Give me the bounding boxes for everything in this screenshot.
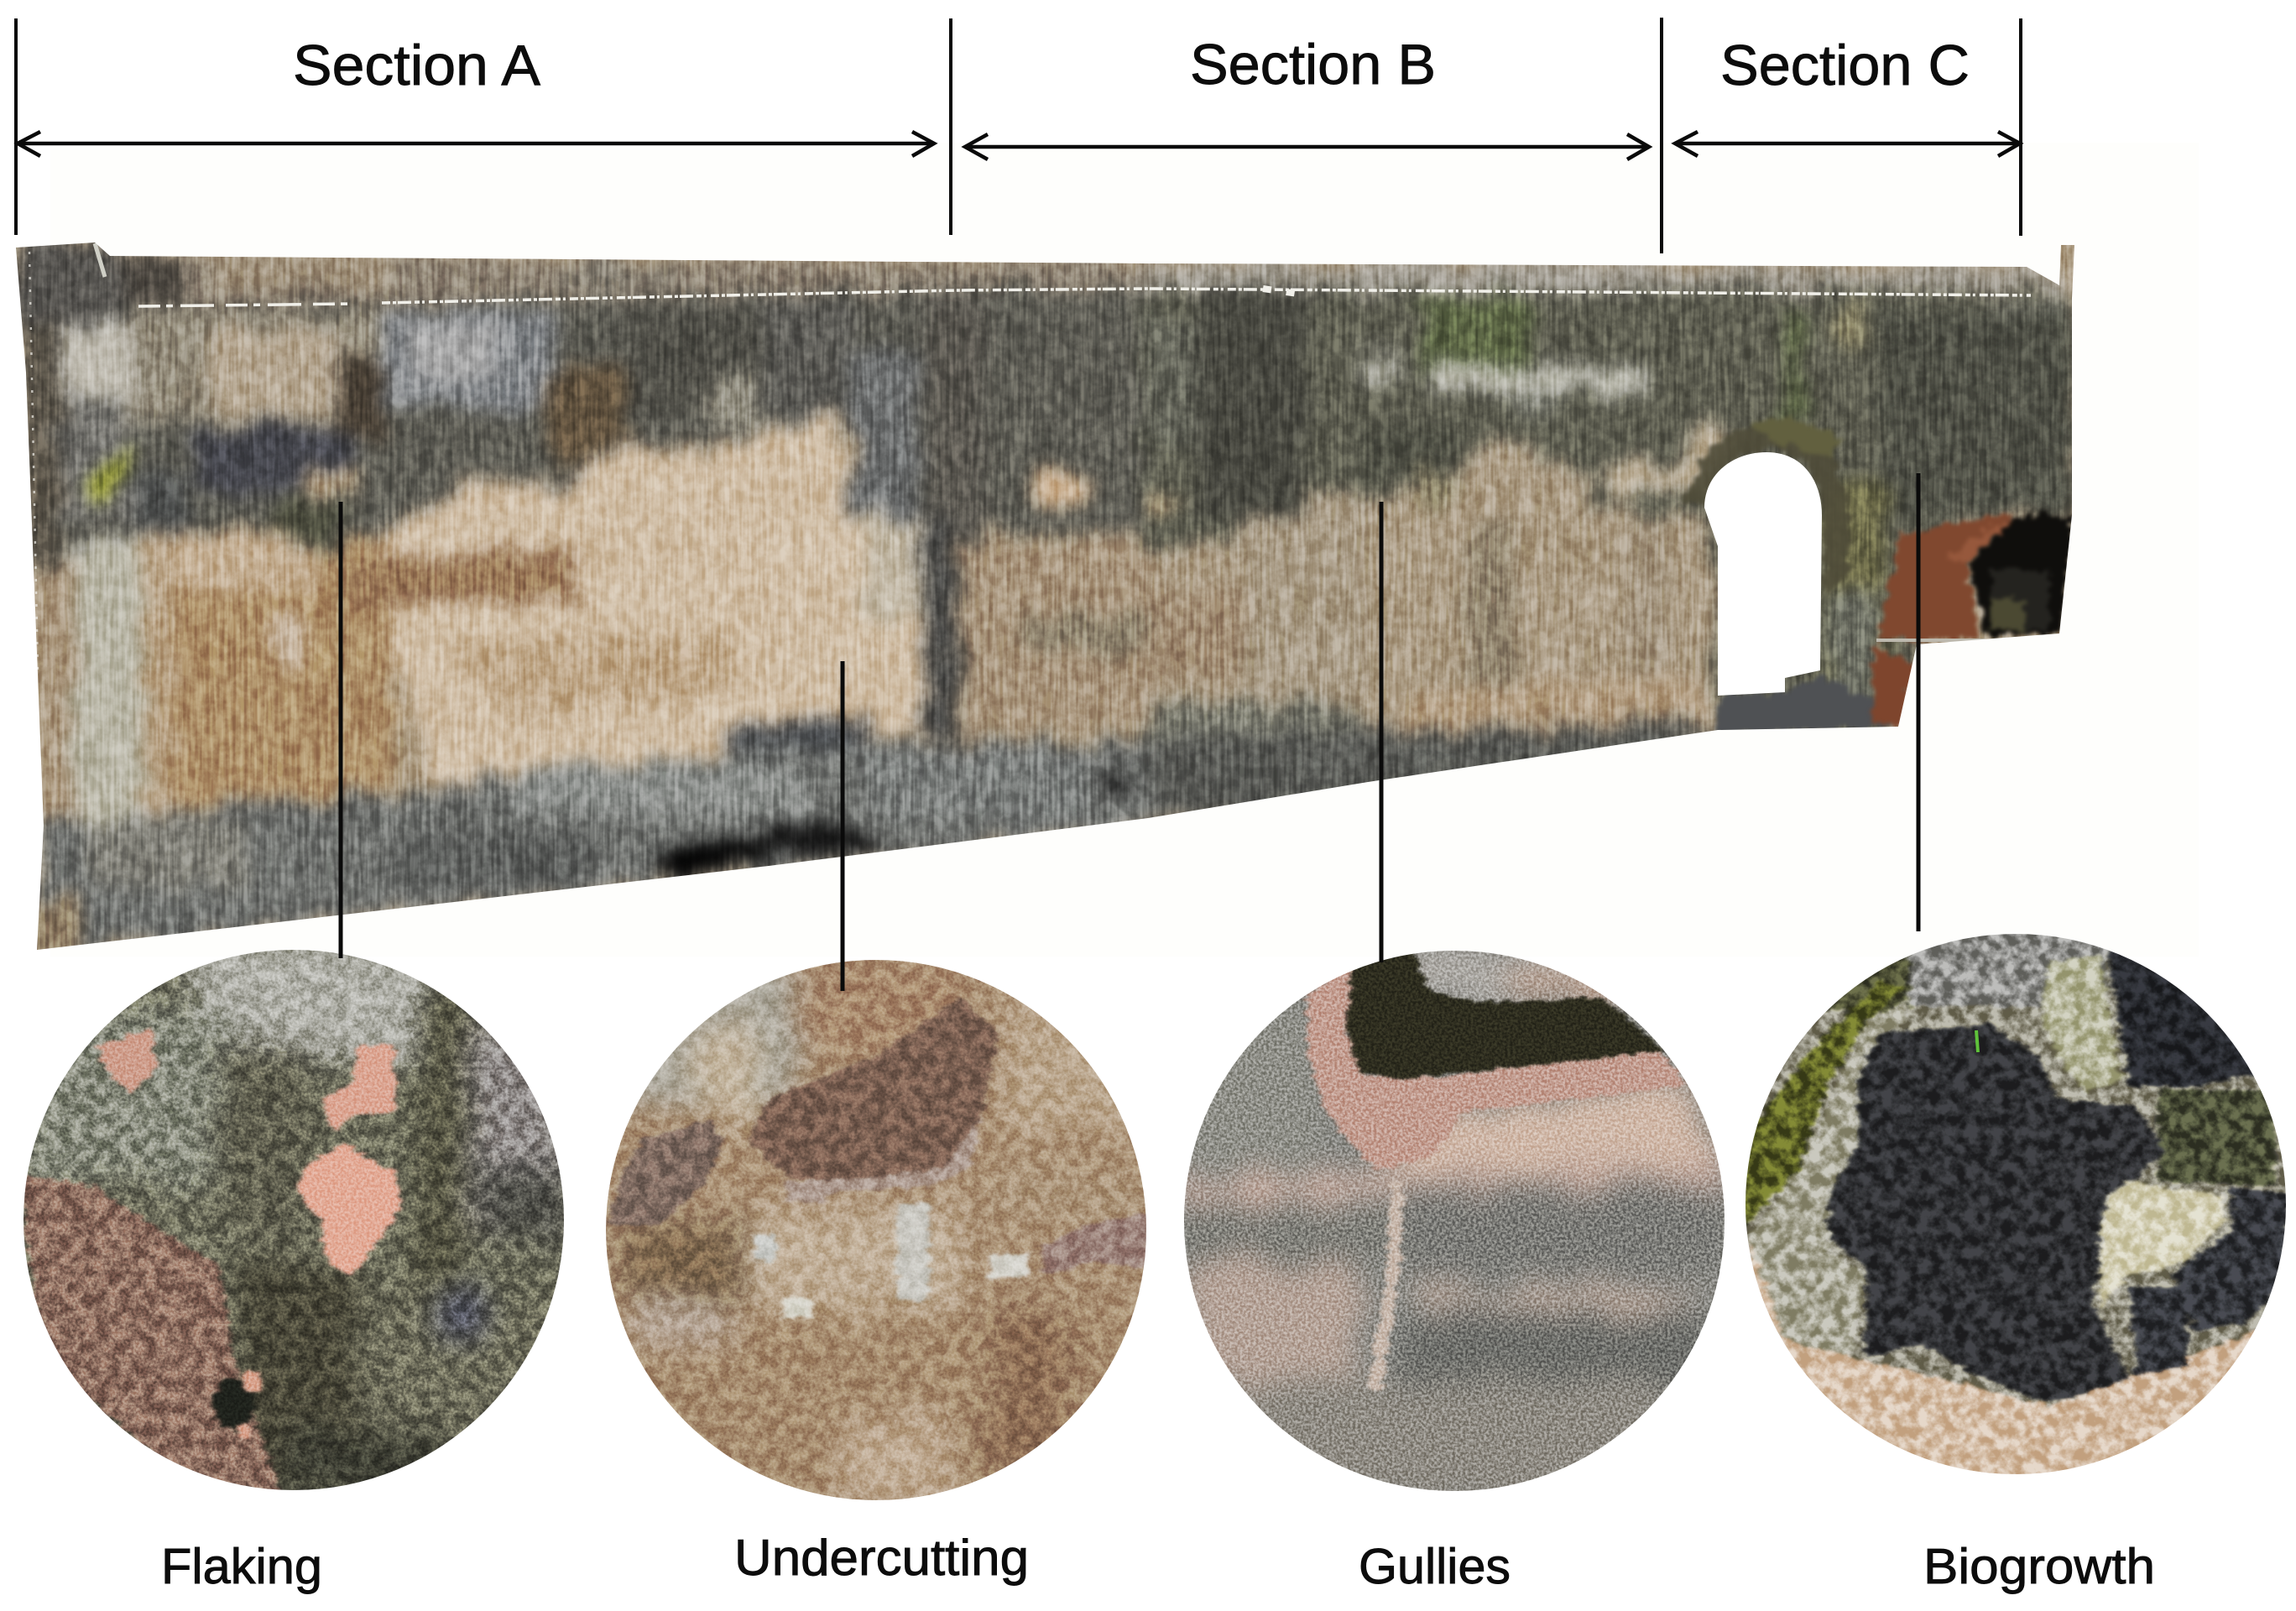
heading: Section C: Section C xyxy=(1720,34,1970,97)
wall section A surface xyxy=(14,245,1171,957)
leader line: undercutting xyxy=(841,661,844,991)
label: Undercutting: Undercutting xyxy=(734,1530,1029,1586)
label: Flaking: Flaking xyxy=(161,1539,322,1594)
pink exposed stone patches xyxy=(95,1029,403,1440)
red exposed aggregate xyxy=(18,1173,282,1494)
detail circle: biogrowth xyxy=(1734,927,2296,1494)
leader line: gullies xyxy=(1380,502,1383,962)
dimension arrow: section B xyxy=(965,134,1649,159)
detail circle: undercutting xyxy=(596,948,1158,1510)
dark doorway and interior xyxy=(1968,515,2074,635)
wall section B and C surface xyxy=(1140,264,2078,820)
ground seen through the arch xyxy=(1718,674,1898,734)
heading: Section A: Section A xyxy=(293,34,541,97)
dimension arrow: section A xyxy=(18,132,934,156)
gully moss and pink channel xyxy=(1306,949,1686,1388)
label: Gullies: Gullies xyxy=(1359,1539,1511,1594)
heading: Section B: Section B xyxy=(1190,33,1436,96)
undercut brown lobes xyxy=(608,998,1150,1318)
leader line: biogrowth xyxy=(1917,473,1920,931)
leader line: flaking xyxy=(339,502,342,958)
wall photo: full elevation of the rampart xyxy=(0,227,2098,965)
label: Biogrowth: Biogrowth xyxy=(1923,1539,2155,1594)
white mortar line under coping xyxy=(29,243,2031,671)
detail circle: gullies xyxy=(1175,944,1737,1506)
red timber structure xyxy=(1873,512,2019,727)
arch surround xyxy=(1697,415,1842,587)
arch opening xyxy=(1704,452,1822,696)
wall texture: vertical striations xyxy=(0,227,2098,965)
section boundary ticks xyxy=(16,18,2021,253)
dimension arrow: section C xyxy=(1675,132,2020,156)
detail circle: flaking xyxy=(17,940,571,1502)
